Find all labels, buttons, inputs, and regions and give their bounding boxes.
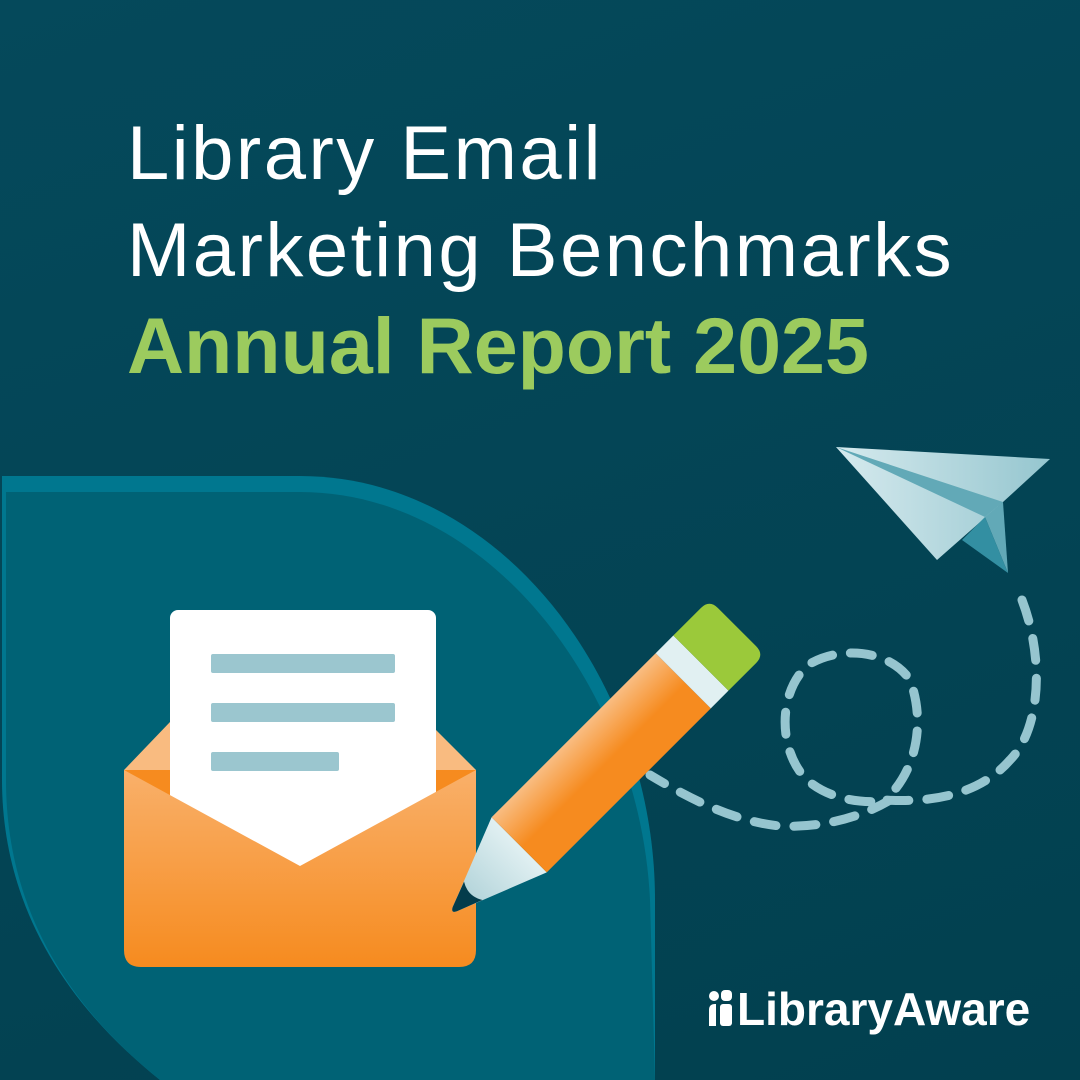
icon: dashed flight path: [650, 600, 1036, 826]
logo: LibraryAware: [709, 983, 1030, 1035]
icon: logo mark: [709, 990, 732, 1026]
letter: [170, 610, 436, 890]
title: [127, 111, 954, 390]
logo text: LibraryAware: [737, 983, 1030, 1035]
title line 2: Marketing Benchmarks: [127, 208, 954, 293]
envelope front: [124, 770, 476, 967]
icon: pencil: [425, 599, 765, 939]
icon: envelope with letter: [124, 610, 476, 967]
icon: paper plane: [836, 447, 1050, 573]
title line 1: Library Email: [127, 111, 603, 196]
subtitle: annual report: Annual Report 2025: [127, 301, 869, 390]
panel: teal blob: [2, 476, 655, 1080]
